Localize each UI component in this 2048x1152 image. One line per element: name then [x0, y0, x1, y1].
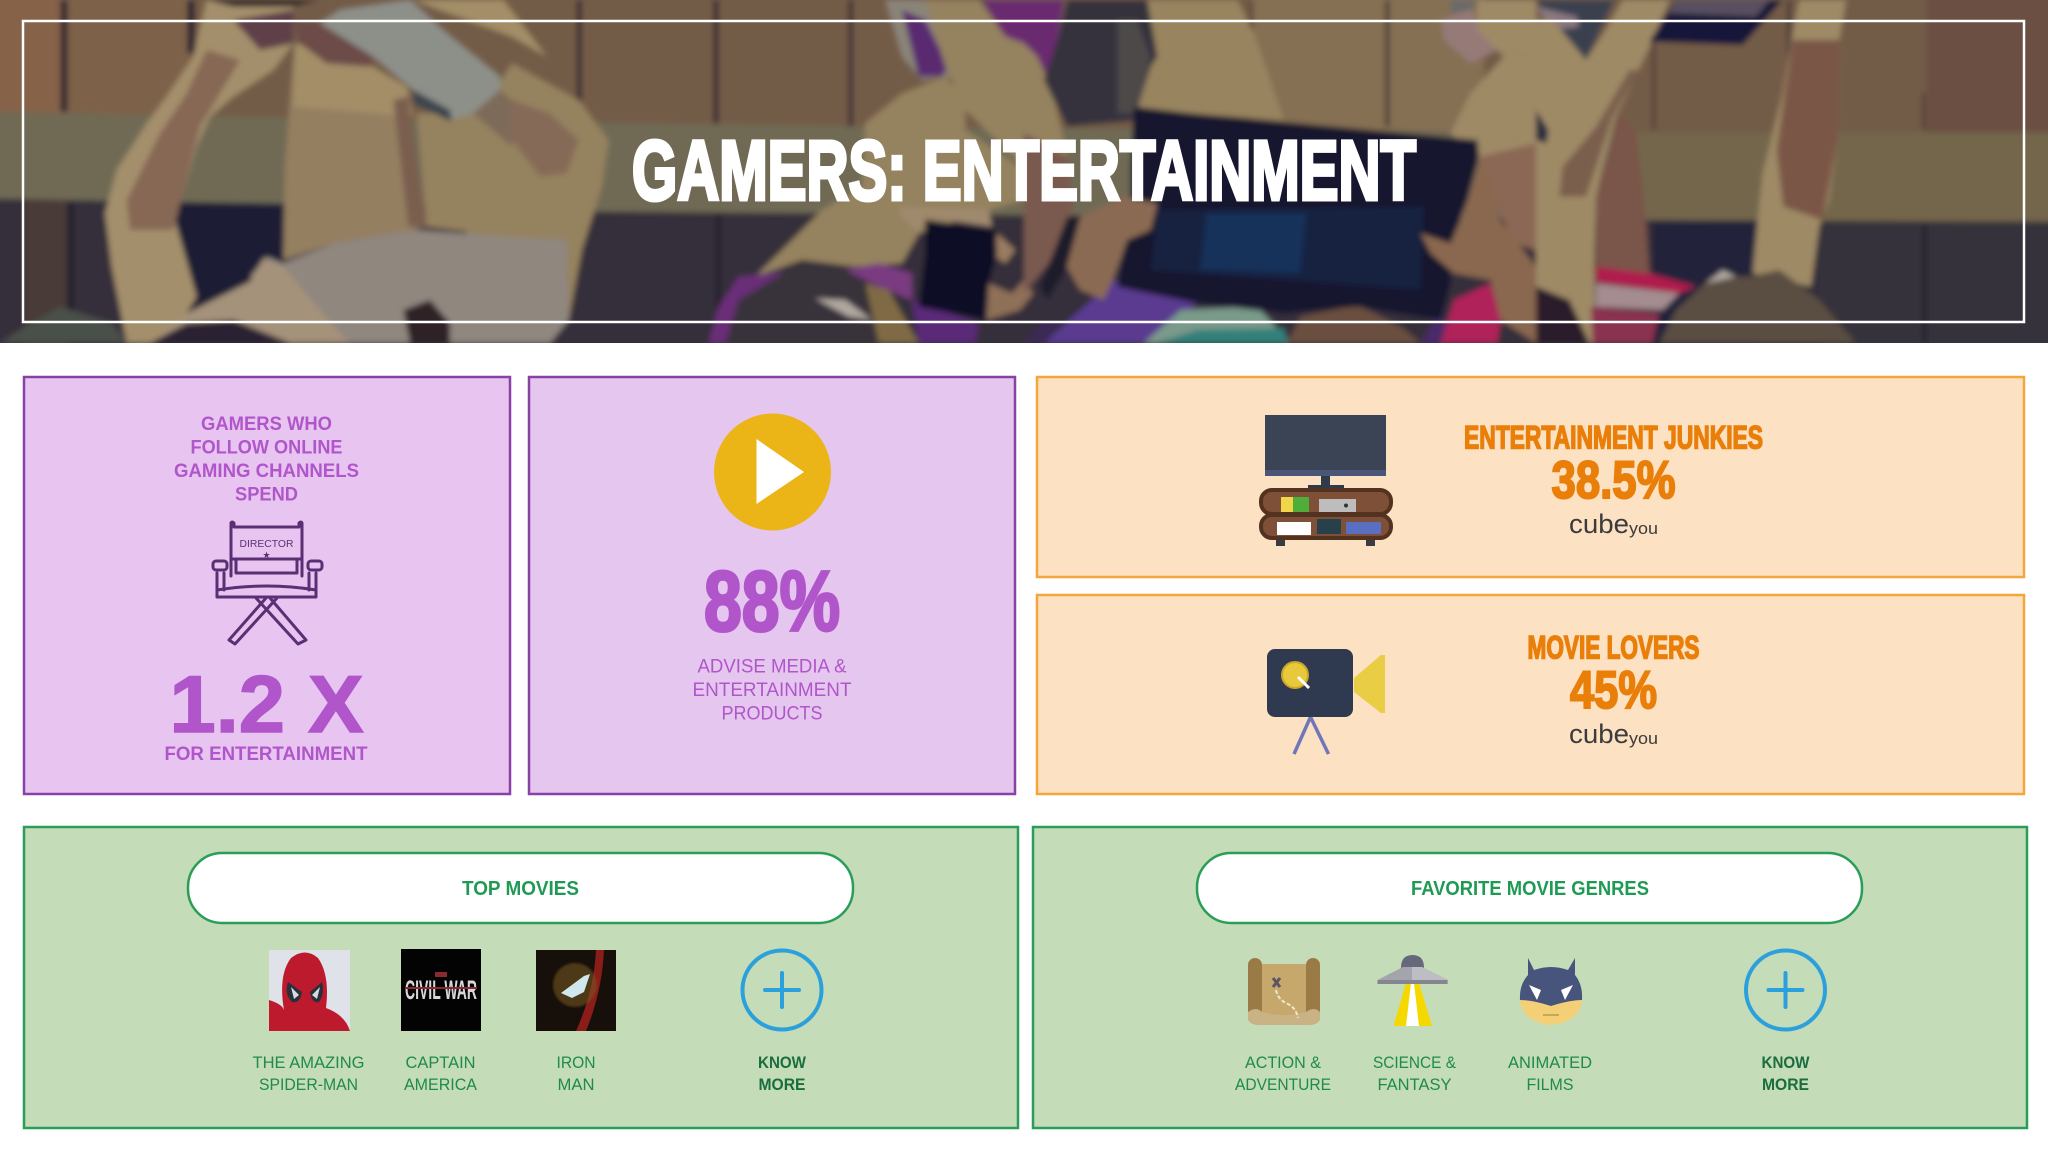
panel: gamers spend on entertainment	[24, 377, 510, 794]
icon: treasure map	[1248, 958, 1320, 1025]
caption: iron man: IRON	[556, 1053, 596, 1072]
caption: advise media	[692, 657, 852, 724]
icon: plus button	[742, 950, 822, 1030]
caption: science and fantasy: FANTASY	[1378, 1075, 1452, 1094]
logo: cubeyou: cube	[1569, 719, 1629, 749]
know more link: MORE	[758, 1075, 806, 1094]
pill heading: favorite movie genres	[1197, 853, 1862, 923]
know more link	[1762, 1053, 1810, 1094]
pill heading: favorite movie genres: FAVORITE MOVIE GENRES	[1411, 878, 1649, 900]
poster: iron man	[536, 950, 616, 1031]
icon: ufo	[1378, 955, 1448, 1026]
know more link: MORE	[1762, 1075, 1809, 1094]
left figure	[414, 110, 478, 234]
poster: spider-man	[269, 950, 350, 1031]
logo: cubeyou: cube	[1569, 509, 1629, 539]
caption: action and adventure	[1235, 1053, 1331, 1094]
icon: play button	[714, 414, 831, 530]
caption: iron man: MAN	[558, 1075, 594, 1094]
header banner	[0, 0, 2048, 363]
pill heading: top movies	[188, 853, 853, 923]
heading: entertainment junkies: ENTERTAINMENT JUNKIES	[1464, 420, 1763, 456]
panel: advise media and entertainment products	[529, 377, 1015, 794]
icon: bat mask	[1520, 958, 1582, 1025]
stat: 38.5%: 38.5%	[1552, 451, 1676, 510]
stat: 1.2 X: 1.2 X	[170, 660, 364, 750]
icon: director chair: DIRECTOR	[240, 538, 294, 550]
poster: civil war: CIVIL WAR	[405, 975, 477, 1005]
header frame	[23, 21, 2024, 322]
caption: action and adventure: ADVENTURE	[1235, 1075, 1331, 1094]
panel: entertainment junkies	[1037, 377, 2024, 577]
caption: captain america	[404, 1053, 478, 1094]
know more link	[758, 1053, 807, 1094]
caption: advise media: ADVISE MEDIA &	[698, 657, 847, 678]
logo: cubeyou: you	[1629, 519, 1658, 538]
caption: advise media: ENTERTAINMENT	[692, 680, 852, 701]
intro text: FOLLOW ONLINE	[190, 438, 342, 458]
intro text	[174, 414, 359, 506]
caption: science and fantasy	[1373, 1053, 1457, 1094]
panel: movie lovers	[1037, 595, 2024, 794]
caption: science and fantasy: SCIENCE &	[1373, 1053, 1457, 1072]
intro text: SPEND	[235, 484, 298, 506]
stat: 88%: 88%	[704, 554, 840, 650]
know more link: KNOW	[758, 1053, 807, 1072]
caption: the amazing spider-man	[252, 1053, 364, 1094]
caption: the amazing spider-man: SPIDER-MAN	[259, 1075, 358, 1094]
header photo: kids with devices against a fence	[0, 0, 2048, 363]
caption: captain america: CAPTAIN	[406, 1053, 476, 1072]
middle figure	[885, 0, 952, 80]
tablet holder and tablet	[1024, 133, 1074, 293]
intro text: GAMING CHANNELS	[174, 461, 359, 482]
stat: 45%: 45%	[1570, 661, 1657, 720]
caption: action and adventure: ACTION &	[1245, 1053, 1322, 1072]
title: GAMERS: ENTERTAINMENT	[632, 124, 1416, 218]
panel: top movies	[24, 827, 1018, 1128]
caption: animated films	[1508, 1053, 1592, 1094]
caption: animated films: ANIMATED	[1508, 1053, 1592, 1072]
intro text: GAMERS WHO	[201, 414, 332, 435]
heading: movie lovers: MOVIE LOVERS	[1528, 630, 1700, 666]
caption: captain america: AMERICA	[404, 1075, 478, 1094]
pill heading: top movies: TOP MOVIES	[462, 878, 579, 900]
know more link: KNOW	[1762, 1053, 1810, 1072]
caption: for entertainment: FOR ENTERTAINMENT	[164, 744, 368, 765]
right figure	[1536, 0, 1614, 60]
icon: movie camera	[1267, 649, 1385, 754]
caption: iron man	[556, 1053, 596, 1094]
caption: advise media: PRODUCTS	[722, 704, 822, 724]
icon: plus button	[1746, 950, 1825, 1030]
panel: favorite movie genres	[1033, 827, 2027, 1128]
logo: cubeyou	[1569, 719, 1658, 749]
caption: animated films: FILMS	[1526, 1075, 1574, 1094]
logo: cubeyou	[1569, 509, 1658, 539]
icon: tv on shelf	[1261, 415, 1391, 546]
icon: director chair	[213, 522, 322, 644]
logo: cubeyou: you	[1629, 729, 1658, 748]
icon: director chair: ★	[262, 550, 271, 560]
caption: the amazing spider-man: THE AMAZING	[252, 1053, 364, 1072]
poster: civil war	[401, 949, 481, 1031]
